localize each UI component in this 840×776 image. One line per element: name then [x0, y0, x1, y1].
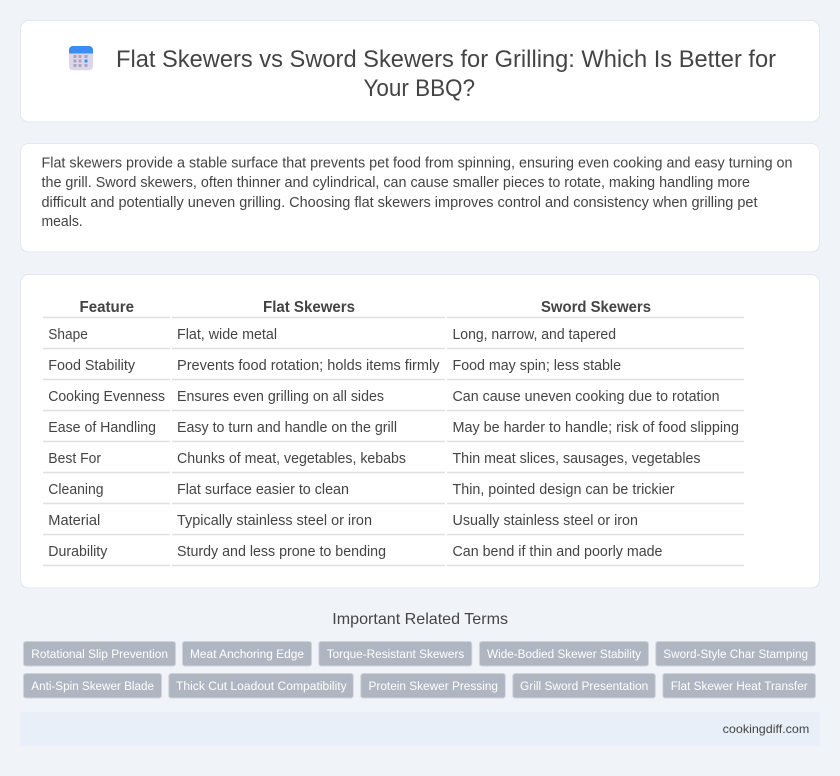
- tag: [480, 642, 648, 666]
- text block: summary: Flat skewers provide a stable surface that prevents pet food from spinning, ensuring even cooking and easy turning on: [42, 156, 792, 172]
- row: durability: Sturdy and less prone to bending: [177, 544, 386, 560]
- tag: [319, 642, 472, 666]
- tag: [513, 674, 655, 698]
- row: cleaning: Flat surface easier to clean: [177, 482, 349, 498]
- title: Flat Skewers vs Sword Skewers for Grilling: Which Is Better for: [116, 46, 776, 73]
- row: durability: [48, 544, 663, 560]
- row: cooking evenness: Ensures even grilling on all sides: [177, 389, 384, 405]
- row: ease of handling: Easy to turn and handle on the grill: [177, 420, 397, 436]
- row: cleaning: Cleaning: [48, 482, 104, 498]
- row: ease of handling: [48, 420, 739, 436]
- row: material: Material: [48, 513, 100, 529]
- row: food stability: Food Stability: [48, 358, 136, 374]
- row: ease of handling: Ease of Handling: [48, 420, 156, 436]
- row: best for: Thin meat slices, sausages, vegetables: [452, 451, 700, 467]
- row: durability: Can bend if thin and poorly made: [452, 544, 662, 560]
- tag: [24, 674, 162, 698]
- row: durability: Durability: [48, 544, 108, 560]
- text block: summary: [42, 156, 792, 230]
- row: food stability: [48, 358, 621, 374]
- heading: important related terms: Important Related Terms: [332, 611, 508, 628]
- panel: title header: [20, 20, 820, 122]
- row: material: Usually stainless steel or iron: [452, 513, 638, 529]
- tag: Grill Sword Presentation: [520, 679, 648, 693]
- tag: Wide-Bodied Skewer Stability: [487, 647, 642, 661]
- row: best for: Chunks of meat, vegetables, kebabs: [177, 451, 406, 467]
- row: material: [48, 513, 638, 529]
- tag: Flat Skewer Heat Transfer: [671, 679, 808, 693]
- panel: summary paragraph: [20, 144, 820, 252]
- row: shape: [48, 327, 616, 343]
- row: cooking evenness: Can cause uneven cooking due to rotation: [452, 389, 720, 405]
- text block: summary: difficult and potentially uneven grilling. Choosing flat skewers improves control and consistency when grilling pet: [42, 195, 758, 211]
- tag: [361, 674, 505, 698]
- row: shape: Long, narrow, and tapered: [452, 327, 616, 343]
- tag: Meat Anchoring Edge: [190, 647, 304, 661]
- tag: Thick Cut Loadout Compatibility: [176, 679, 348, 693]
- row: food stability: Prevents food rotation; holds items firmly: [177, 358, 440, 374]
- tag: Rotational Slip Prevention: [31, 647, 168, 661]
- footer: [20, 712, 820, 746]
- text block: summary: the grill. Sword skewers, often thinner and cylindrical, can cause smaller pieces to rotate, making handling more: [42, 175, 750, 191]
- table header row: Sword Skewers: [541, 299, 651, 316]
- title: [116, 46, 776, 102]
- table header row: Flat Skewers: [263, 299, 355, 316]
- row: cooking evenness: [48, 389, 720, 405]
- tag: [169, 674, 353, 698]
- icon: calendar: [69, 46, 93, 70]
- row: food stability: Food may spin; less stable: [452, 358, 621, 374]
- tag: Protein Skewer Pressing: [368, 679, 498, 693]
- text block: summary: meals.: [42, 214, 83, 230]
- table header row: [80, 299, 651, 316]
- tag: Torque-Resistant Skewers: [327, 647, 464, 661]
- row: cooking evenness: Cooking Evenness: [48, 389, 165, 405]
- title: Your BBQ?: [364, 75, 475, 102]
- table header row: Feature: [80, 299, 134, 316]
- row: best for: [48, 451, 701, 467]
- tag: Sword-Style Char Stamping: [663, 647, 808, 661]
- row: cleaning: Thin, pointed design can be trickier: [452, 482, 675, 498]
- row: ease of handling: May be harder to handle; risk of food slipping: [452, 420, 739, 436]
- tag: [663, 674, 816, 698]
- row: shape: Shape: [48, 327, 88, 343]
- footer: cookingdiff.com: [723, 722, 809, 736]
- tag: Anti-Spin Skewer Blade: [31, 679, 154, 693]
- panel: comparison table: [20, 274, 820, 588]
- row: cleaning: [48, 482, 675, 498]
- tag: [24, 642, 176, 666]
- tag: [656, 642, 816, 666]
- tags: related terms: [24, 642, 816, 698]
- tag: [182, 642, 312, 666]
- row: best for: Best For: [48, 451, 101, 467]
- row: material: Typically stainless steel or iron: [177, 513, 372, 529]
- row: shape: Flat, wide metal: [177, 327, 277, 343]
